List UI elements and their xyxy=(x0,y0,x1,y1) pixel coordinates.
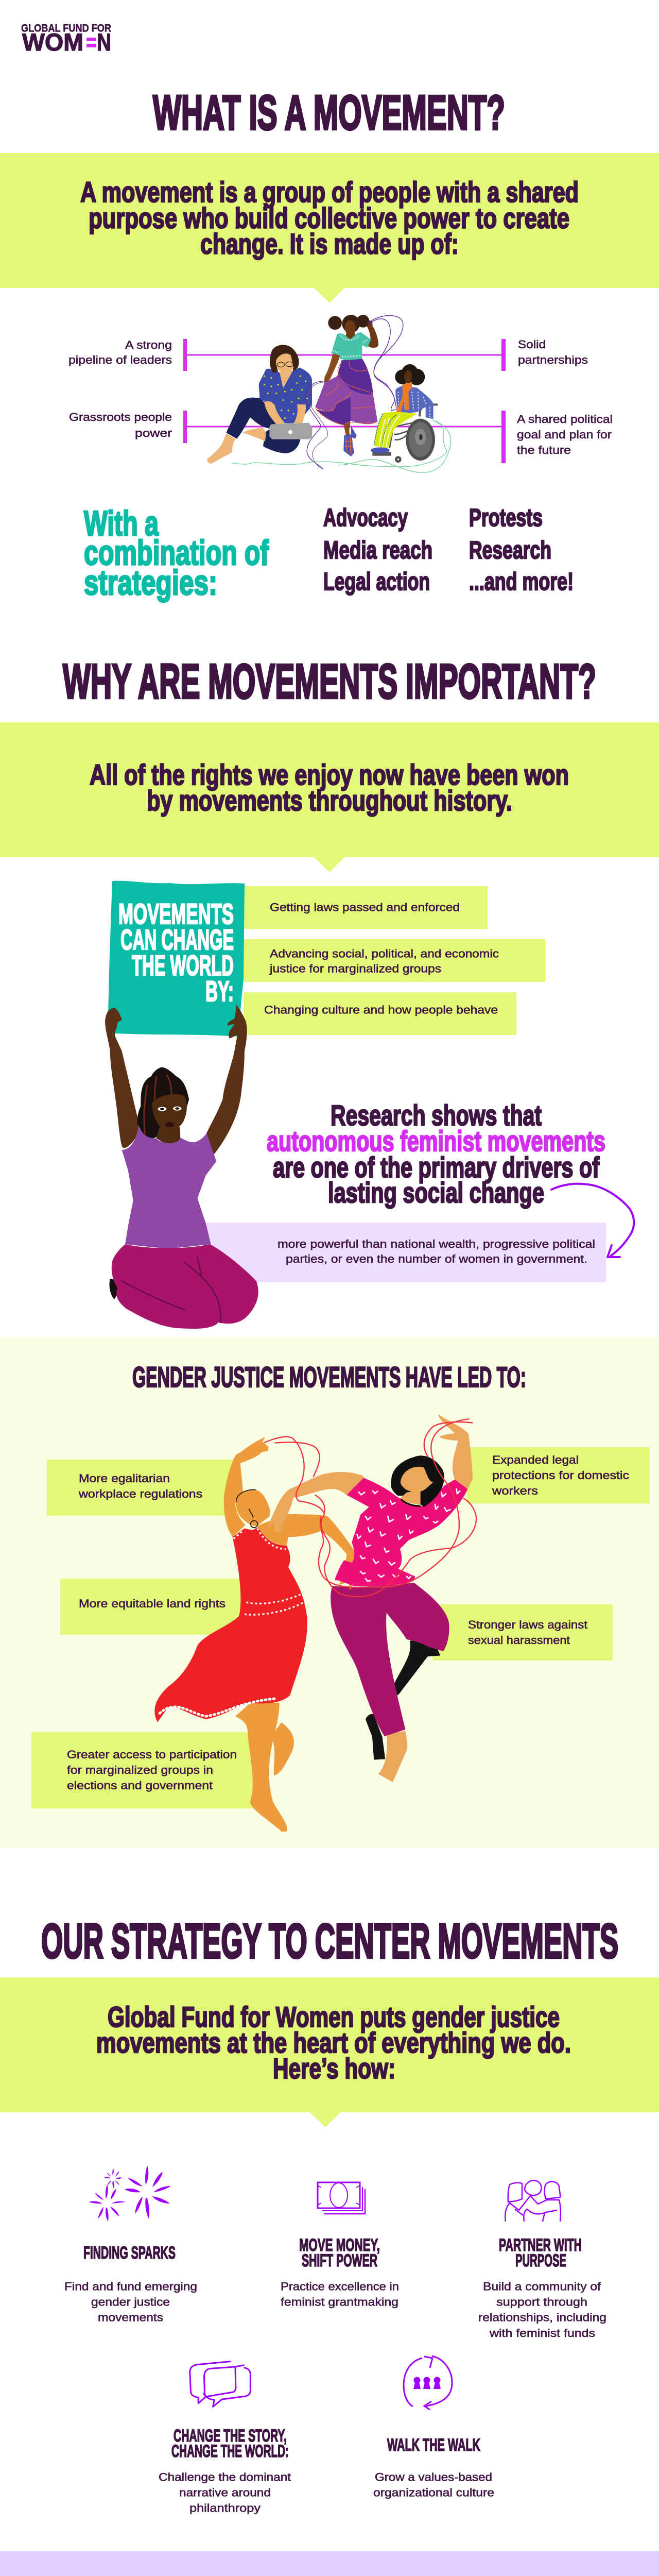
panel: lavender feminist movements note xyxy=(202,1223,606,1282)
block: move money, shift power xyxy=(281,2235,399,2308)
block: finding sparks: movements xyxy=(98,2311,163,2324)
box: greater access to participation xyxy=(31,1732,256,1808)
label: shared political goal: A shared political xyxy=(517,413,613,426)
threads: purple and green xyxy=(232,316,451,472)
sign: movements can change the world by: CAN CHANGE xyxy=(120,923,234,956)
box: egalitarian workplace regulations: More egalitarian xyxy=(79,1472,170,1485)
block: change the story: Challenge the dominant xyxy=(159,2471,291,2483)
heading: with a combination of strategies: combination of xyxy=(84,533,269,572)
block: change the story: narrative around xyxy=(179,2486,271,2499)
box: stronger laws against harassment: sexual harassment xyxy=(468,1634,570,1647)
block: partner with purpose: PURPOSE xyxy=(515,2251,566,2270)
panel: ways movements change the world: Getting laws passed and enforced xyxy=(270,901,460,914)
list: strategies: Protests xyxy=(469,504,543,532)
logo: Global Fund for Women: N xyxy=(97,28,111,56)
panel: lavender feminist movements note: more powerful than national wealth, progressive political xyxy=(278,1238,595,1250)
panel: ways movements change the world: justice for marginalized groups xyxy=(269,962,441,975)
block: change the story xyxy=(159,2426,291,2514)
box: greater access to participation: for marginalized groups in xyxy=(67,1764,213,1776)
block: change the story: CHANGE THE STORY, xyxy=(174,2426,287,2446)
block: finding sparks: Find and fund emerging xyxy=(64,2280,197,2293)
callout: research shows autonomous feminist movements: Research shows that xyxy=(331,1099,542,1131)
panel: rights band xyxy=(0,722,659,872)
icon: cycle with people xyxy=(404,2356,452,2410)
list: strategies xyxy=(323,504,574,596)
threads: red xyxy=(264,1419,476,1597)
block: partner with purpose xyxy=(478,2235,606,2340)
panel: movement definition band xyxy=(0,153,659,303)
icon: sparks xyxy=(89,2165,171,2222)
icon: partners xyxy=(505,2180,561,2222)
block: walk the walk: Grow a values-based xyxy=(375,2471,492,2483)
block: partner with purpose: relationships, including xyxy=(478,2311,606,2324)
label: shared political goal: the future xyxy=(517,444,571,456)
label: shared political goal: goal and plan for xyxy=(517,428,612,441)
block: partner with purpose: with feminist funds xyxy=(489,2327,595,2340)
figure: left dancer raised arm and head xyxy=(224,1437,270,1537)
label: a strong pipeline of leaders: pipeline of leaders xyxy=(68,353,172,366)
panel: ways movements change the world: Changing culture and how people behave xyxy=(264,1004,498,1016)
panel: ways movements change the world xyxy=(244,886,545,1035)
illustration: kneeling woman holding sign xyxy=(105,1004,258,1329)
box: egalitarian workplace regulations xyxy=(47,1460,237,1516)
panel: rights band: by movements throughout history. xyxy=(147,784,512,817)
figure: woman in wheelchair xyxy=(371,364,438,463)
block: move money, shift power: MOVE MONEY, xyxy=(299,2235,380,2255)
box: expanded legal protections: protections for domestic xyxy=(492,1469,629,1482)
illustration: three women with threads xyxy=(207,315,451,472)
panel: lavender feminist movements note: parties, or even the number of women in government. xyxy=(286,1252,587,1265)
block: move money, shift power: SHIFT POWER xyxy=(302,2251,377,2270)
label: grassroots people power: power xyxy=(135,427,172,439)
box: expanded legal protections: workers xyxy=(492,1484,538,1497)
icon: speech bubbles xyxy=(190,2362,250,2406)
block: finding sparks: FINDING SPARKS xyxy=(83,2243,176,2263)
box: stronger laws against harassment: Stronger laws against xyxy=(468,1618,587,1631)
label: solid partnerships: Solid xyxy=(518,338,546,351)
box: stronger laws against harassment xyxy=(432,1604,613,1660)
block: partner with purpose: support through xyxy=(496,2296,587,2308)
box: egalitarian workplace regulations: workplace regulations xyxy=(78,1487,202,1500)
arrow: curved purple xyxy=(551,1184,634,1257)
sign: movements can change the world by xyxy=(108,881,245,1037)
figure: woman with laptop xyxy=(207,345,313,464)
block: partner with purpose: PARTNER WITH xyxy=(499,2235,582,2255)
logo: Global Fund for Women: GLOBAL FUND FOR xyxy=(21,23,111,34)
panel: strategy band xyxy=(0,1977,659,2127)
block: finding sparks: gender justice xyxy=(91,2296,170,2308)
figure: right dancer hair and face xyxy=(391,1455,444,1507)
panel: ways movements change the world: Advancing social, political, and economic xyxy=(270,947,499,960)
block: walk the walk: organizational culture xyxy=(373,2486,494,2499)
label: a strong pipeline of leaders: A strong xyxy=(125,338,172,351)
heading: with a combination of strategies: strategies: xyxy=(84,563,217,602)
logo: Global Fund for Women xyxy=(21,23,111,56)
list: strategies: Research xyxy=(469,537,551,564)
callout: research shows autonomous feminist movements xyxy=(267,1099,605,1209)
figure: red dress top xyxy=(233,1527,307,1618)
box: greater access to participation: Greater access to participation xyxy=(67,1748,237,1761)
panel: movement definition band: change. It is made up of: xyxy=(200,228,459,260)
block: finding sparks xyxy=(64,2243,197,2324)
sign: movements can change the world by: THE WORLD xyxy=(132,949,234,981)
label: solid partnerships: partnerships xyxy=(518,353,588,366)
illustration: dancers upper body xyxy=(224,1414,476,1618)
label: shared political goal xyxy=(517,413,613,456)
figure: pink shirt xyxy=(335,1478,467,1586)
label: grassroots people power: Grassroots people xyxy=(69,411,172,423)
box: equitable land rights: More equitable land rights xyxy=(79,1597,226,1610)
list: strategies: ...and more! xyxy=(469,568,574,596)
block: partner with purpose: Build a community of xyxy=(483,2280,601,2293)
connector bars and lines xyxy=(183,339,506,463)
list: strategies: Legal action xyxy=(323,568,430,596)
callout: research shows autonomous feminist movements: lasting social change xyxy=(328,1176,544,1209)
logo: Global Fund for Women: WOM xyxy=(22,28,83,56)
heading: with a combination of strategies: With a xyxy=(84,504,159,543)
list: strategies: Advocacy xyxy=(323,504,408,532)
block: walk the walk xyxy=(373,2435,494,2499)
box: equitable land rights xyxy=(60,1579,248,1635)
figure: left dancer shoulder and arm xyxy=(257,1514,357,1590)
box: greater access to participation: elections and government xyxy=(67,1779,213,1792)
block: move money, shift power: Practice excellence in xyxy=(281,2280,399,2293)
block: change the story: CHANGE THE WORLD: xyxy=(171,2442,289,2461)
sign: movements can change the world by: MOVEMENTS xyxy=(118,897,234,930)
panel: closing call to action xyxy=(0,2551,659,2576)
block: walk the walk: WALK THE WALK xyxy=(387,2435,480,2455)
box: expanded legal protections xyxy=(466,1447,650,1503)
box: expanded legal protections: Expanded legal xyxy=(492,1453,579,1466)
figure: right dancer arm across xyxy=(267,1472,363,1533)
block: move money, shift power: feminist grantmaking xyxy=(281,2296,398,2308)
block: change the story: philanthropy xyxy=(189,2502,261,2514)
icon: money stack xyxy=(318,2182,365,2214)
label: grassroots people power xyxy=(69,411,172,439)
label: solid partnerships xyxy=(518,338,588,366)
sign: movements can change the world by: BY: xyxy=(205,975,234,1007)
label: a strong pipeline of leaders xyxy=(68,338,172,366)
list: strategies: Media reach xyxy=(323,537,432,564)
figure: standing woman in purple skirt xyxy=(315,315,378,456)
figure: right dancer raised arm xyxy=(439,1414,473,1489)
panel: strategy band: Here’s how: xyxy=(273,2052,395,2084)
heading: with a combination of strategies xyxy=(84,504,269,602)
panel: gender justice movements have led to xyxy=(0,1337,659,1848)
illustration: dancers lower body xyxy=(154,1583,449,1832)
